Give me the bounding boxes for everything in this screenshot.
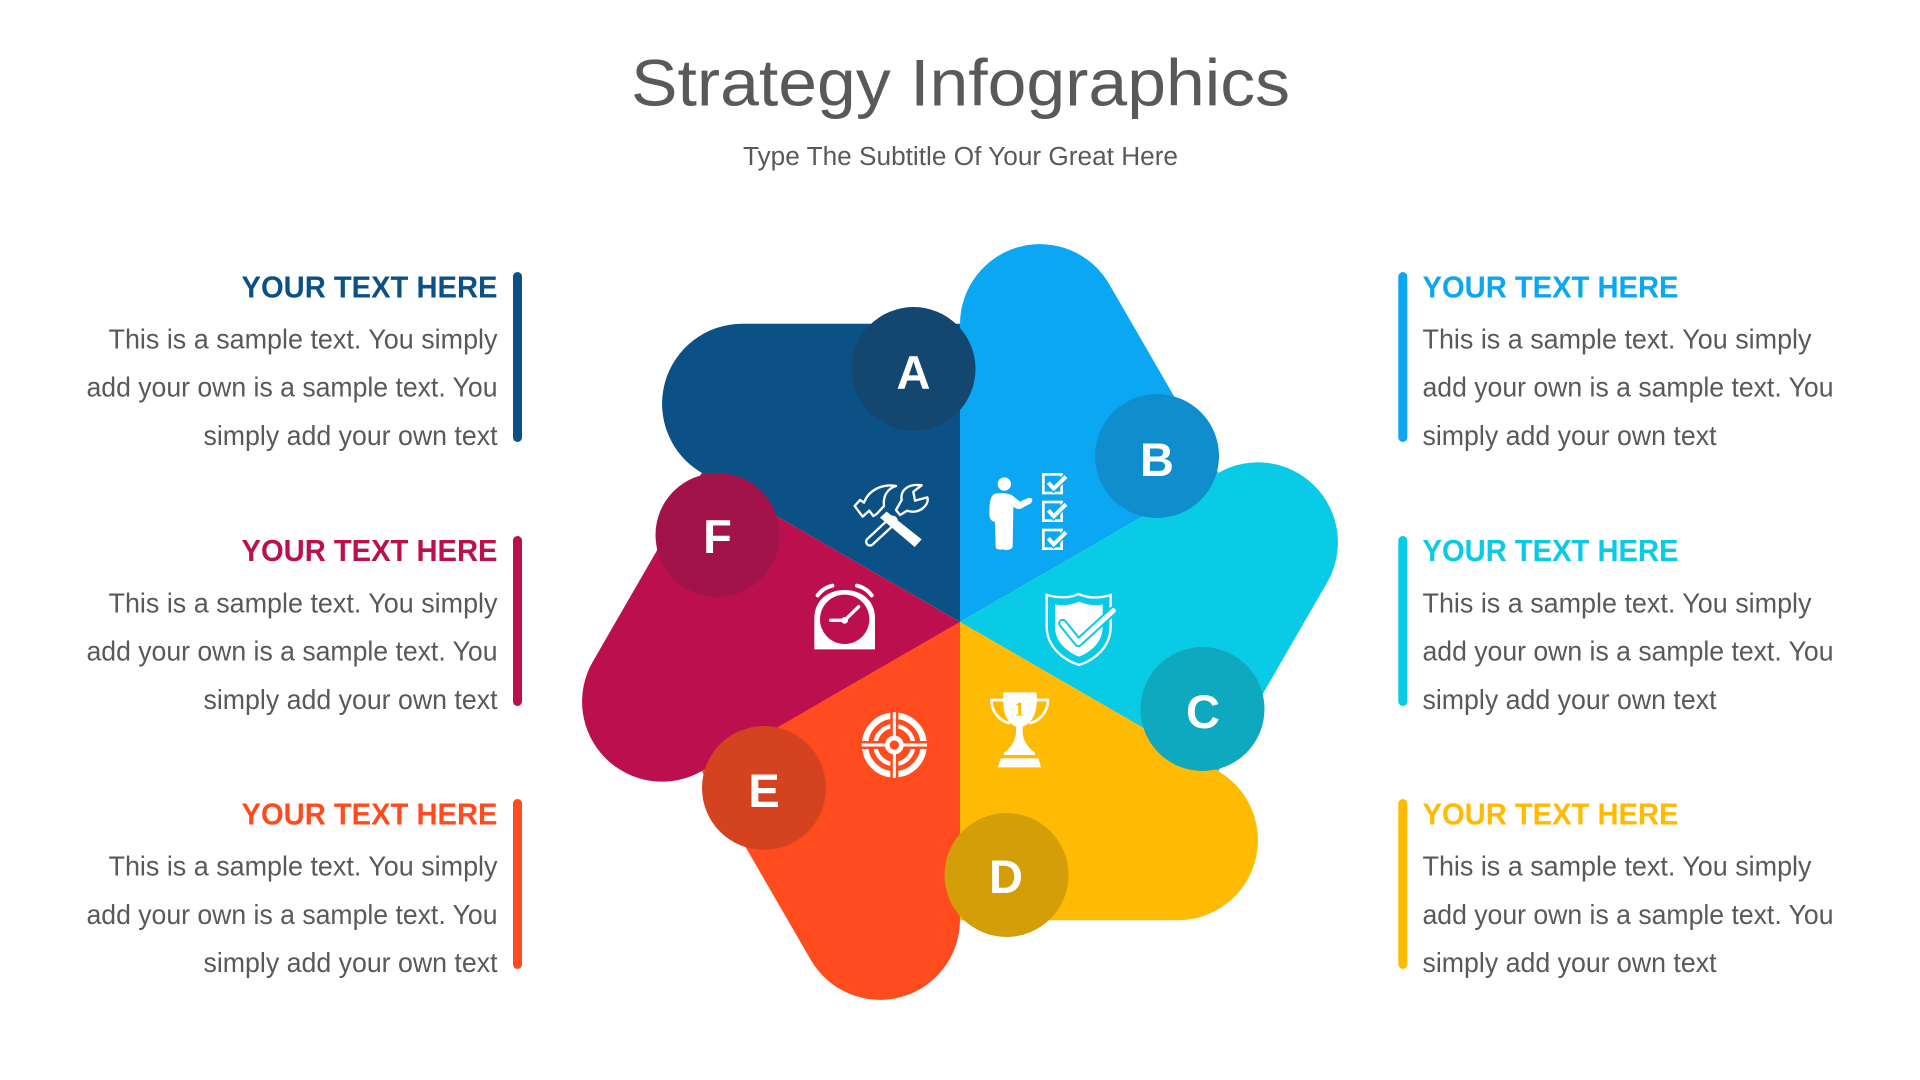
heading C: YOUR TEXT HERE: [1422, 533, 1678, 568]
body text D: simply add your own text: [1422, 947, 1717, 978]
panel: text block F: [86, 533, 522, 715]
badge A: A: [897, 346, 930, 399]
body text A: simply add your own text: [204, 420, 498, 451]
panel: text block E: [86, 796, 522, 978]
icon: trophy: [991, 692, 1048, 767]
accent bar A: [513, 272, 522, 442]
panel: text block C: [1398, 533, 1834, 715]
petal F: [504, 398, 960, 811]
icon: trophy: 1: [1014, 698, 1024, 720]
chart: six-petal flower diagram: [504, 209, 1416, 1035]
badge D: D: [989, 850, 1023, 903]
body text F: This is a sample text. You simply: [108, 587, 498, 618]
icon: alarm clock: [814, 586, 875, 649]
heading B: YOUR TEXT HERE: [1422, 270, 1678, 304]
panel: text block A: [86, 270, 522, 451]
accent bar C: [1398, 536, 1407, 706]
heading E: YOUR TEXT HERE: [242, 796, 498, 832]
body text F: add your own is a sample text. You: [86, 636, 498, 667]
body text A: [86, 323, 498, 451]
accent bar F: [513, 536, 522, 706]
body text A: add your own is a sample text. You: [86, 372, 498, 403]
body text C: [1422, 587, 1834, 715]
body text E: This is a sample text. You simply: [108, 851, 498, 882]
body text E: simply add your own text: [204, 947, 498, 978]
icon: shield with check: [1047, 594, 1113, 665]
badge B: B: [1140, 433, 1174, 486]
badge C: C: [1186, 685, 1220, 738]
body text C: add your own is a sample text. You: [1422, 636, 1834, 667]
body text D: [1422, 851, 1834, 978]
badge C: [1140, 647, 1264, 771]
accent bar D: [1398, 799, 1407, 969]
body text C: simply add your own text: [1422, 684, 1717, 715]
body text B: simply add your own text: [1422, 420, 1717, 451]
body text B: This is a sample text. You simply: [1422, 323, 1812, 354]
body text D: add your own is a sample text. You: [1422, 899, 1834, 930]
body text B: add your own is a sample text. You: [1422, 372, 1834, 403]
body text D: This is a sample text. You simply: [1422, 851, 1812, 882]
panel: text block D: [1398, 796, 1834, 978]
title: Strategy Infographics: [631, 46, 1290, 120]
icon: target: [859, 710, 929, 780]
icon: hammer and wrench: [855, 485, 928, 547]
body text E: add your own is a sample text. You: [86, 899, 498, 930]
body text F: simply add your own text: [204, 684, 498, 715]
icon: presenter with checklist: [989, 474, 1066, 550]
petal B: [960, 244, 1218, 622]
badge F: F: [703, 510, 732, 563]
heading F: YOUR TEXT HERE: [242, 533, 498, 568]
panel: text block B: [1398, 270, 1834, 451]
body text A: This is a sample text. You simply: [108, 323, 498, 354]
body text E: [86, 851, 498, 978]
body text B: [1422, 323, 1834, 451]
badge B: [1095, 394, 1219, 518]
badge E: E: [748, 764, 780, 817]
accent bar B: [1398, 272, 1407, 442]
badge E: [702, 726, 826, 850]
heading A: YOUR TEXT HERE: [242, 270, 498, 304]
badge A: [852, 307, 976, 431]
petal A: [633, 209, 1089, 622]
badge F: [656, 473, 780, 597]
petal C: [960, 433, 1416, 846]
petal D: [831, 622, 1287, 1035]
heading D: YOUR TEXT HERE: [1422, 796, 1678, 832]
body text F: [86, 587, 498, 715]
subtitle: Type The Subtitle Of Your Great Here: [743, 143, 1178, 171]
badge D: [944, 813, 1068, 937]
petal E: [702, 622, 960, 1000]
body text C: This is a sample text. You simply: [1422, 587, 1812, 618]
accent bar E: [513, 799, 522, 969]
